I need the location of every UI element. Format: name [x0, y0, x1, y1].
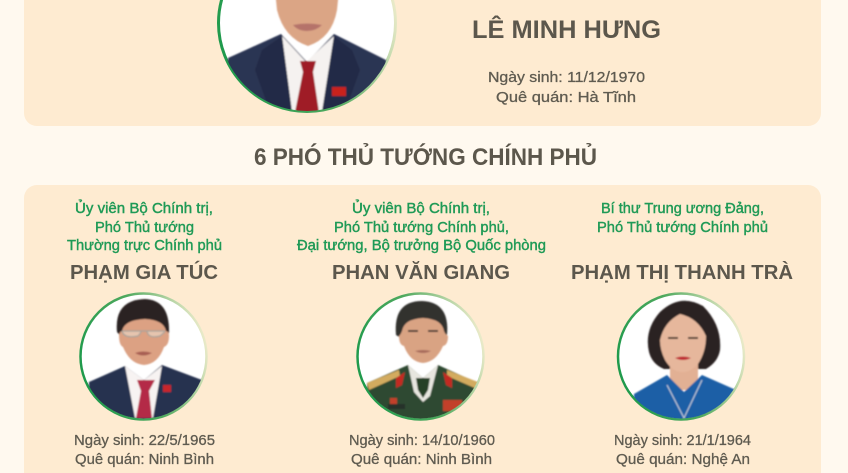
- name: Lê Minh Hưng: LÊ MINH HƯNG: [472, 14, 661, 44]
- birth date: Ngày sinh: 22/5/1965: [74, 432, 215, 449]
- role text: Ủy viên Bộ Chính trị,: [352, 199, 490, 217]
- home town: Quê quán: Hà Tĩnh: [496, 89, 636, 106]
- role text: Phó Thủ tướng Chính phủ,: [334, 220, 509, 236]
- name: PHẠM THỊ THANH TRÀ: [571, 261, 793, 284]
- role text: [67, 199, 222, 254]
- name: PHẠM GIA TÚC: [70, 260, 218, 284]
- home town: Quê quán: Nghệ An: [616, 451, 750, 468]
- home town: Quê quán: Ninh Bình: [351, 451, 492, 468]
- role text: Bí thư Trung ương Đảng,: [601, 201, 764, 217]
- card: Phạm Thị Thanh Trà: [571, 201, 793, 468]
- role text: [297, 199, 546, 254]
- birth date: Ngày sinh: 14/10/1960: [349, 432, 495, 449]
- name: PHAN VĂN GIANG: [332, 261, 510, 284]
- home town: Quê quán: Ninh Bình: [75, 451, 214, 468]
- role text: Đại tướng, Bộ trưởng Bộ Quốc phòng: [297, 238, 546, 254]
- portrait: Lê Minh Hưng: [218, 0, 396, 115]
- role text: Ủy viên Bộ Chính trị,: [75, 199, 213, 217]
- panel: deputy prime ministers: [24, 185, 821, 473]
- portrait: [80, 294, 206, 425]
- heading: deputy prime ministers: 6 PHÓ THỦ TƯỚNG CHÍNH PHỦ: [254, 142, 597, 171]
- birth date: Ngày sinh: 21/1/1964: [614, 432, 751, 449]
- birth date: Ngày sinh: 11/12/1970: [488, 69, 645, 86]
- card: Phạm Gia Túc: [67, 199, 222, 468]
- role text: Phó Thủ tướng Chính phủ: [597, 220, 768, 236]
- role text: Thường trực Chính phủ: [67, 238, 222, 254]
- panel: prime minister: [24, 0, 821, 126]
- card: Phan Văn Giang: [297, 199, 546, 468]
- role text: [597, 201, 768, 236]
- portrait: [358, 294, 484, 425]
- portrait: [618, 294, 744, 425]
- role text: Phó Thủ tướng: [95, 220, 194, 236]
